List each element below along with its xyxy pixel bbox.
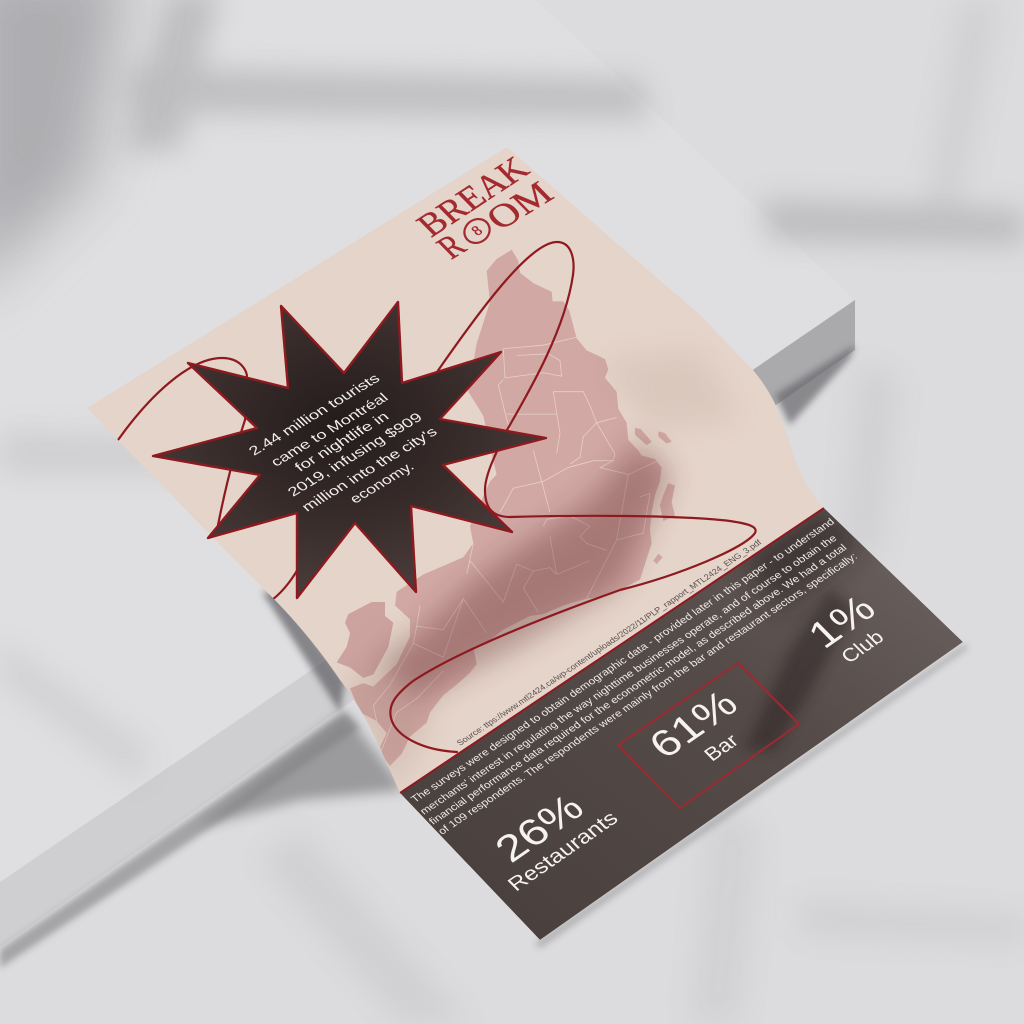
logo: Break Room	[409, 149, 561, 266]
star text	[245, 371, 440, 514]
star text: for nightlife in	[291, 409, 392, 474]
stat: restaurants: Restaurants	[503, 807, 623, 896]
paper fold shadows	[340, 350, 740, 790]
map of Montréal	[337, 250, 675, 766]
stat: bar highlighted box	[618, 663, 799, 808]
concrete slab	[0, 0, 855, 947]
map: Laval island	[337, 602, 393, 678]
flyer sheet	[87, 147, 963, 940]
paper background	[87, 147, 960, 940]
logo: Break Room: R	[429, 227, 474, 266]
stat: club: 1%	[799, 587, 884, 656]
survey paragraph: The surveys were designed to obtain demographic data - provided later in this paper - to understand	[409, 517, 837, 805]
map: borough boundaries	[373, 337, 658, 754]
stat: restaurants: 26%	[486, 787, 593, 870]
stat: bar highlighted box: 61%	[640, 683, 747, 766]
paper cast shadow	[0, 345, 968, 968]
dark stats band	[400, 500, 963, 940]
stat: restaurants	[486, 787, 623, 896]
map: main island	[350, 250, 662, 766]
star text: million into the city's	[298, 424, 440, 514]
starburst callout	[153, 302, 546, 598]
band top rule	[400, 508, 824, 793]
source line: Source: ttps://www.mtl2424.ca/wp-content/uploads/2022/11/PLP_rapport_MTL2424_ENG_3.pdf	[454, 537, 764, 747]
star text: 2019, infusing $909	[284, 409, 426, 499]
stat: bar highlighted box: Bar	[700, 730, 744, 766]
survey paragraph: merchants' interest in regulating the way nighttime businesses operate, and of course to obtain the	[418, 533, 840, 817]
star text: economy.	[346, 459, 417, 506]
star text: came to Montréal	[267, 390, 391, 469]
logo: Break Room: BREAK	[409, 149, 537, 244]
star text: 2.44 million tourists	[245, 371, 383, 458]
logo: Break Room: 8	[469, 224, 486, 239]
red swirl line	[118, 242, 756, 752]
survey paragraph: of 109 respondents. The respondents were mainly from the bar and restaurant sectors, specifically:	[436, 552, 860, 837]
star shape	[153, 302, 546, 598]
logo: Break Room: OM	[478, 174, 561, 237]
stat: club: Club	[837, 627, 889, 668]
survey paragraph: financial performance data required for the econometric model, as described above. We had a total	[427, 543, 849, 827]
map: small islands	[635, 428, 675, 564]
